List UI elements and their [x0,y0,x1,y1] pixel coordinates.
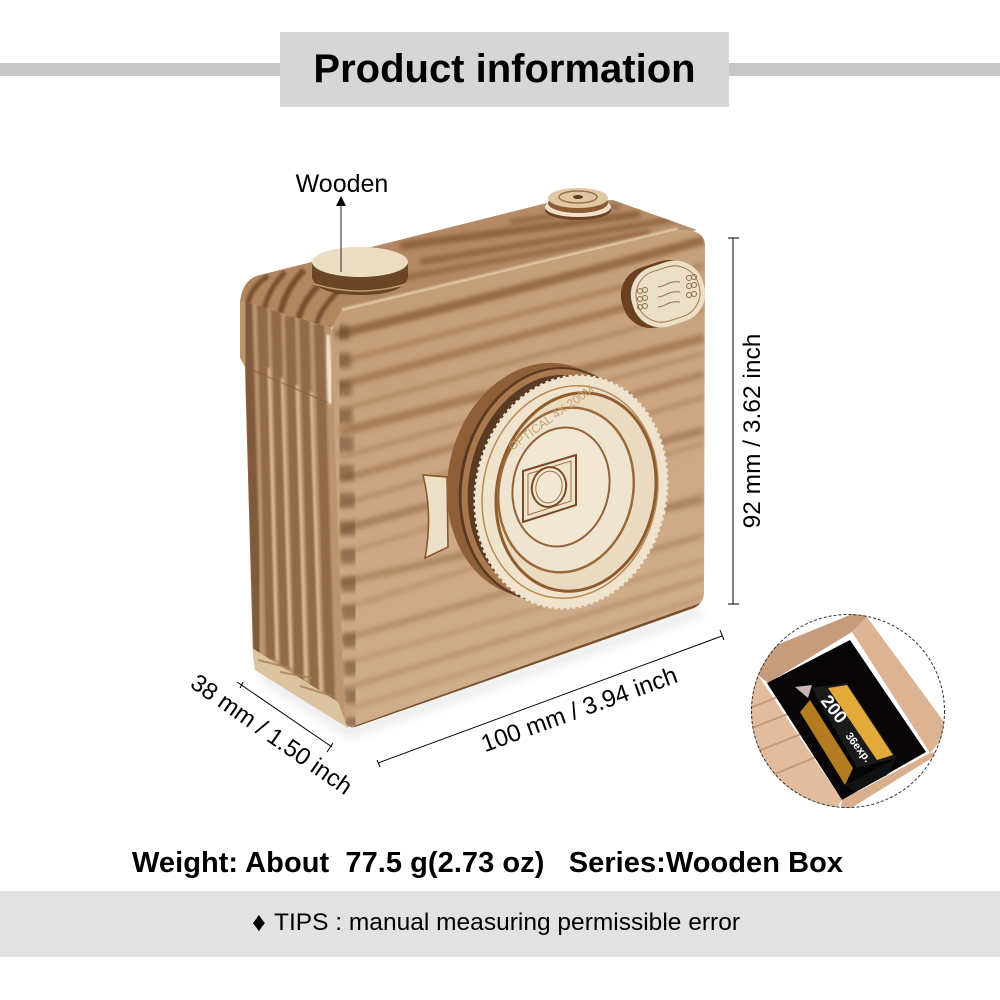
header band right rule [729,63,1000,76]
title [280,32,729,107]
ground shadow [262,612,700,733]
dimension: wooden arrow: Wooden [296,170,388,198]
dimension: height [728,238,766,604]
inset top rim [758,614,867,683]
film canister: 200 [817,691,851,727]
inset: film inside box [751,614,945,808]
inset black interior [767,640,926,800]
dimension: wooden arrow [296,170,388,272]
top large dial [312,247,408,295]
inset bottom wall [841,752,936,808]
title: Product information [313,47,696,91]
dimension: width [377,630,724,767]
dimension: height: 92 mm / 3.62 inch [739,334,766,528]
lens [426,345,688,626]
dimension: depth: 38 mm / 1.50 inch [185,669,357,801]
film canister [795,683,897,792]
front face [331,230,705,727]
inset right wall [852,617,950,753]
wooden camera box [240,188,713,733]
film canister: 36exp. [843,730,873,765]
viewfinder plate [613,252,713,336]
tips band: TIPS : manual measuring permissible error [274,909,740,936]
left side face [240,300,348,728]
weight and series: Weight: About 77.5 g(2.73 oz) Series:Wooden Box [132,847,843,879]
dimension: width: 100 mm / 3.94 inch [478,662,681,758]
tips band: ♦ [252,907,266,937]
lens tab [423,475,448,558]
top face [240,200,697,328]
lens: OPTICAL 4X 200M [506,382,596,453]
tips band [0,891,1000,957]
top small dial [545,188,611,220]
inset left wood [751,675,842,808]
header band left rule [0,63,280,76]
